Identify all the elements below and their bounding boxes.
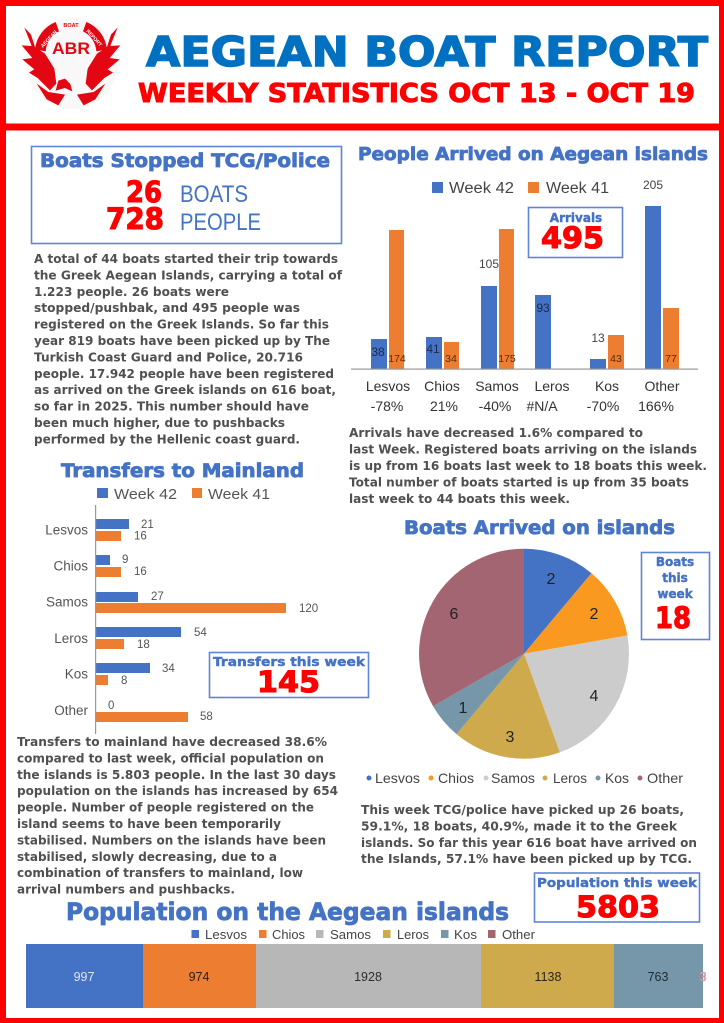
pie chart: boats by island [419, 549, 629, 759]
bar chart: transfers: Lesvos [45, 522, 88, 538]
pie legend: Other [647, 770, 683, 786]
bar chart: transfers: Other [54, 703, 89, 718]
callout: arrivals [528, 208, 622, 258]
text block: weekly summary: people. 17.942 people have been registered [34, 367, 334, 381]
chart legend: Week 41 [208, 487, 270, 503]
callout: boats this week: week [657, 587, 694, 601]
bar chart: transfers: 21 [141, 519, 154, 531]
stacked bar legend: Chios [272, 927, 305, 942]
bar chart: transfers: Samos [46, 594, 88, 610]
text block: arrivals comparison: Total number of boats started is up from 35 boats [349, 476, 689, 490]
text block: transfers summary: Transfers to mainland have decreased 38.6% [17, 735, 327, 749]
callout: transfers this week [210, 652, 368, 699]
icon: ABR logo: ABR [52, 39, 90, 58]
heading: transfers: Transfers to Mainland [61, 461, 304, 482]
text block: weekly summary: performed by the Hellenic coast guard. [34, 432, 300, 446]
callout: transfers this week: 145 [257, 665, 320, 699]
bar chart: arrivals: 38 [371, 345, 385, 359]
text block: transfers summary [17, 735, 338, 897]
bar chart: arrivals: -40% [479, 398, 511, 414]
stacked bar: population [26, 944, 707, 1008]
text block: weekly summary: A total of 44 boats started their trip towards [34, 252, 338, 266]
stacked bar legend: Other [502, 927, 536, 942]
pie legend: Kos [605, 770, 629, 786]
text block: weekly summary: Turkish Coast Guard and Police, 20.716 [34, 350, 303, 364]
stat: boats: BOATS [180, 181, 248, 208]
pie chart: boats by island: 4 [590, 688, 599, 705]
bar chart: arrivals: Chios [424, 378, 460, 394]
chart legend [432, 180, 609, 197]
bar chart: arrivals: Lesvos [366, 378, 410, 394]
bar chart: transfers: 9 [122, 554, 128, 566]
text block: weekly summary: 1.223 people. 26 boats were [34, 285, 229, 299]
bar chart: arrivals: 205 [643, 178, 663, 192]
icon: ABR logo [22, 17, 120, 109]
pie chart: boats by island: 1 [459, 700, 468, 717]
callout: transfers this week: Transfers this week [213, 654, 366, 669]
stacked bar legend: Samos [330, 927, 371, 942]
chart legend: Week 42 [449, 180, 514, 197]
callout: boats this week: 18 [655, 601, 691, 635]
text block: arrivals comparison: last week to 44 boats this week. [349, 492, 570, 506]
stacked bar legend [192, 927, 536, 942]
text block: weekly summary: registered on the Greek Islands. So far this [34, 318, 329, 332]
text block: transfers summary: population on the islands has increased by 654 [17, 784, 338, 798]
bar chart: arrivals: 175 [498, 353, 516, 365]
bar chart: arrivals: 105 [479, 257, 499, 271]
pie legend: Chios [438, 770, 474, 786]
icon: ABR logo: AEGEAN [40, 29, 59, 49]
text block: weekly summary [34, 252, 343, 446]
icon: ABR logo: BOAT [63, 23, 79, 29]
bar chart: transfers: 27 [151, 591, 164, 603]
subtitle: WEEKLY STATISTICS OCT 13 - OCT 19 [138, 79, 695, 109]
bar chart: arrivals: Leros [534, 378, 570, 394]
stat: people: PEOPLE [180, 209, 261, 236]
bar chart: transfers: 120 [299, 603, 318, 615]
text block: weekly summary: so far in 2025. This number should have [34, 400, 309, 414]
text block: transfers summary: combination of transfers to mainland, low [17, 866, 303, 880]
text block: transfers summary: stabilised, slowly decreasing, due to a [17, 850, 277, 864]
text block: arrivals comparison [349, 426, 707, 506]
stacked bar legend: Leros [397, 927, 429, 942]
callout: boats this week: this [662, 571, 688, 585]
text block: pickups summary: This week TCG/police have picked up 26 boats, [361, 803, 684, 817]
bar chart: transfers: 18 [137, 639, 150, 651]
pie legend: Samos [491, 770, 535, 786]
panel: boats stopped [32, 146, 342, 244]
bar chart: arrivals: -78% [371, 398, 403, 414]
bar chart: transfers: 16 [134, 566, 147, 578]
bar chart: transfers: 8 [121, 675, 127, 687]
stacked bar: population: 1928 [354, 970, 382, 984]
callout: population this week: 5803 [576, 890, 660, 924]
stacked bar: population: 974 [189, 970, 209, 984]
bar chart: arrivals: -70% [587, 398, 619, 414]
bar chart: transfers: 0 [108, 700, 114, 712]
callout: population this week [534, 873, 700, 924]
callout: boats this week: Boats [656, 555, 694, 569]
text block: weekly summary: as arrived on the Greek islands on 616 boat, [34, 383, 336, 397]
text block: transfers summary: stabilised. Numbers on the islands have been [17, 833, 326, 847]
pie chart: boats by island: 3 [506, 729, 515, 746]
bar chart: transfers: Chios [53, 558, 88, 574]
bar chart: transfers: 58 [200, 711, 213, 723]
heading: population: Population on the Aegean islands [66, 898, 509, 926]
pie legend: Lesvos [375, 770, 420, 786]
text block: pickups summary: the Islands, 57.1% have been picked up by TCG. [361, 852, 692, 866]
bar chart: arrivals: 41 [426, 342, 440, 356]
bar chart: transfers: 54 [194, 627, 207, 639]
text block: arrivals comparison: last Week. Registered boats arriving on the islands [349, 442, 697, 456]
bar chart: transfers: 16 [134, 530, 147, 542]
bar chart: arrivals: #N/A [526, 398, 558, 414]
stacked bar: population: 3 [700, 970, 707, 984]
bar chart: arrivals: Kos [595, 378, 619, 394]
chart legend [97, 487, 270, 503]
callout: population this week: Population this week [537, 875, 698, 890]
header [22, 17, 708, 109]
icon: ABR logo: REPORT [85, 29, 103, 48]
callout: arrivals: Arrivals [550, 211, 602, 225]
heading: boats arrived: Boats Arrived on islands [404, 518, 675, 539]
bar chart: transfers: 34 [162, 663, 175, 675]
stacked bar: population: 997 [74, 970, 94, 984]
bar chart: transfers: Leros [54, 631, 88, 646]
text block: arrivals comparison: Arrivals have decreased 1.6% compared to [349, 426, 643, 440]
stat: boats [126, 175, 248, 209]
stacked bar: population: 1138 [535, 970, 561, 984]
heading: people arrived: People Arrived on Aegean islands [358, 144, 708, 165]
bar chart: transfers: Kos [65, 666, 88, 682]
title: AEGEAN BOAT REPORT [146, 28, 708, 76]
bar chart: arrivals: Other [644, 378, 680, 394]
bar chart: arrivals: 21% [430, 398, 458, 414]
stacked bar legend: Lesvos [205, 927, 247, 942]
panel: population on the islands [26, 873, 707, 1008]
bar chart: arrivals: 34 [445, 353, 457, 365]
chart legend: Week 41 [546, 180, 609, 197]
pie chart: boats by island: 2 [590, 606, 599, 623]
text block: weekly summary: stopped/pushbak, and 495 people was [34, 301, 300, 315]
panel: people arrived chart [351, 144, 708, 414]
heading: boats stopped: Boats Stopped TCG/Police [40, 151, 330, 172]
bar chart: arrivals: 166% [638, 398, 674, 414]
text block: transfers summary: the islands is 5.803 people. In the last 30 days [17, 768, 336, 782]
text block: weekly summary: the Greek Aegean Islands, carrying a total of [34, 268, 343, 282]
bar chart: arrivals: 93 [536, 301, 550, 315]
text block: arrivals comparison: is up from 16 boats last week to 18 boats this week. [349, 459, 707, 473]
text block: pickups summary: 59.1%, 18 boats, 40.9%, made it to the Greek [361, 820, 678, 834]
bar chart: transfers [45, 505, 318, 734]
pie legend [366, 770, 683, 786]
text block: transfers summary: compared to last week, official population on [17, 751, 324, 765]
bar chart: arrivals: 174 [388, 353, 406, 365]
text block: transfers summary: island seems to have been temporarily [17, 817, 281, 831]
callout: arrivals: 495 [541, 221, 604, 255]
text block: transfers summary: arrival numbers and pushbacks. [17, 883, 235, 897]
bar chart: arrivals [351, 178, 698, 414]
stat: boats: 26 [126, 175, 162, 209]
stacked bar legend: Kos [454, 927, 478, 942]
pie legend: Leros [553, 770, 587, 786]
pie chart: boats by island: 6 [450, 606, 459, 623]
stat: people: 728 [106, 202, 164, 236]
pie chart: boats by island: 2 [547, 571, 556, 588]
chart legend: Week 42 [114, 487, 177, 503]
stacked bar: population: 763 [648, 970, 668, 984]
text block: weekly summary: year 819 boats have been picked up by The [34, 334, 330, 348]
bar chart: arrivals: 43 [610, 353, 622, 365]
text block: pickups summary [361, 803, 697, 866]
text block: weekly summary: been much higher, due to pushbacks [34, 416, 285, 430]
bar chart: arrivals: 13 [591, 331, 605, 345]
callout: boats this week [642, 552, 710, 640]
stat: people [106, 202, 261, 236]
bar chart: arrivals: 77 [665, 353, 677, 365]
text block: pickups summary: islands. So far this year 616 boat have arrived on [361, 836, 697, 850]
text block: transfers summary: people. Number of people registered on the [17, 801, 314, 815]
panel: transfers to mainland [45, 461, 368, 734]
panel: boats arrived on islands [366, 518, 710, 786]
bar chart: arrivals: Samos [475, 378, 519, 394]
